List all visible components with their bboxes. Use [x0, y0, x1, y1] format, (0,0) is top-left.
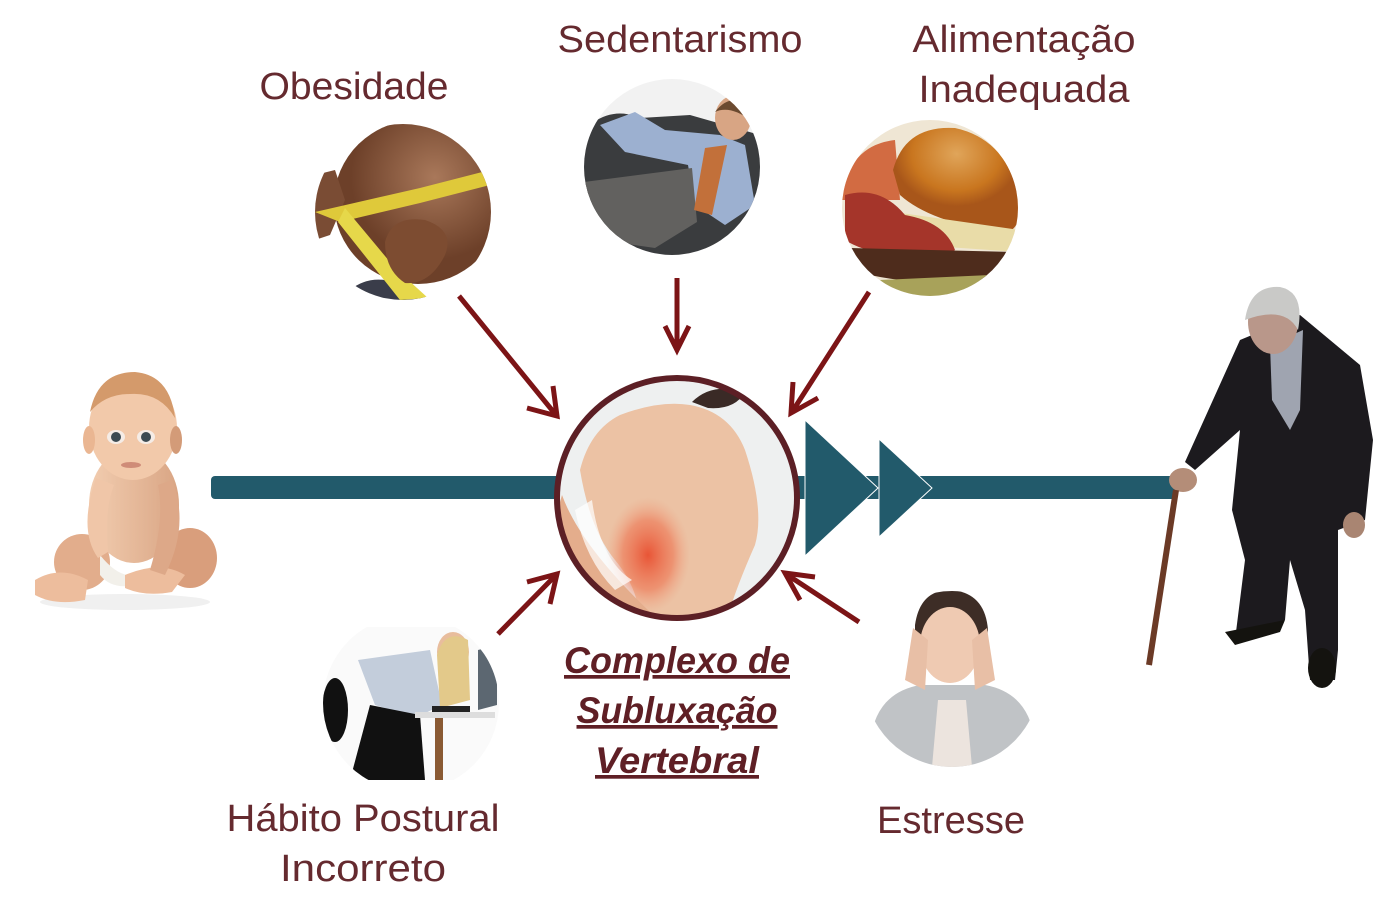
timeline bar	[211, 476, 1176, 499]
label: Alimentação Inadequada: Alimentação	[912, 19, 1136, 61]
label: Hábito Postural Incorreto: Incorreto	[280, 848, 446, 890]
arrow: obesity to centre	[459, 296, 557, 416]
label: Complexo de Subluxação Vertebral: Complexo de	[564, 640, 790, 681]
icon: stress photo	[875, 591, 1030, 767]
label: Complexo de Subluxação Vertebral: Subluxação	[576, 690, 778, 731]
label: Hábito Postural Incorreto: Hábito Postural	[226, 798, 500, 840]
label: Complexo de Subluxação Vertebral	[564, 640, 790, 781]
icon: burger photo	[842, 120, 1020, 296]
label: Obesidade: Obesidade	[260, 66, 448, 108]
label: Alimentação Inadequada: Inadequada	[918, 69, 1130, 111]
label: Alimentação Inadequada	[912, 19, 1136, 111]
label: Hábito Postural Incorreto	[226, 798, 500, 890]
label: Sedentarismo: Sedentarismo	[558, 19, 802, 61]
arrow: diet to centre	[791, 292, 869, 413]
icon: obesity photo	[315, 124, 491, 300]
arrowhead: small chevron	[879, 439, 932, 537]
label: Estresse: Estresse	[877, 800, 1025, 842]
arrow: sedentarism to centre	[665, 278, 689, 350]
icon: baby	[35, 372, 217, 610]
icon: posture photo	[322, 627, 499, 780]
icon: sedentary man photo	[584, 79, 760, 255]
arrow: stress to centre	[785, 573, 859, 622]
icon: elderly man with cane	[1149, 287, 1373, 688]
label: Complexo de Subluxação Vertebral: Vertebral	[595, 740, 760, 781]
icon: back pain centre photo	[555, 378, 797, 625]
arrowhead: large chevron	[805, 420, 878, 556]
arrow: posture to centre	[498, 574, 557, 634]
